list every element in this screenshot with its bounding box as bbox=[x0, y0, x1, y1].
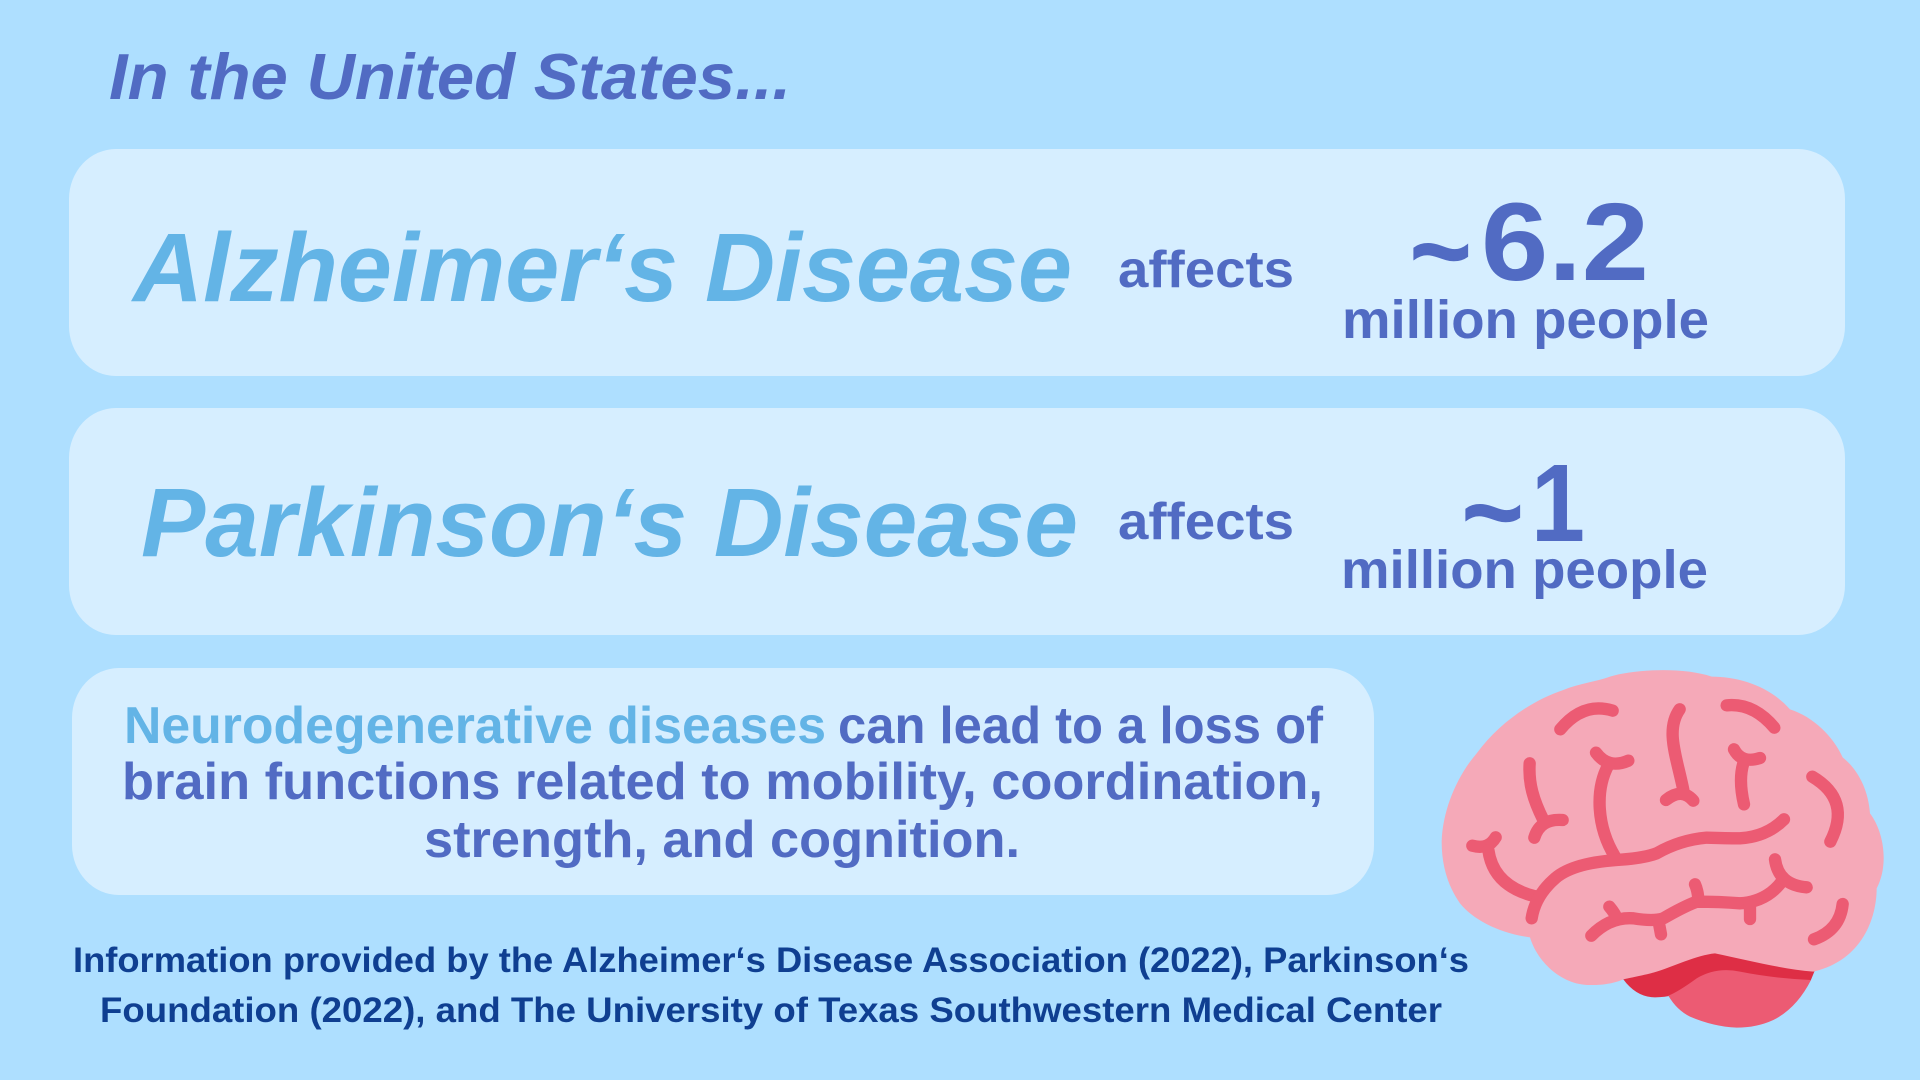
description line 1 highlight: Neurodegenerative diseases bbox=[124, 697, 826, 755]
source citation bbox=[73, 941, 1469, 1030]
number: 1: 1 bbox=[1531, 442, 1585, 565]
disease name: Parkinson's: Parkinson‘s Disease bbox=[141, 468, 1078, 577]
number: 1: ~ bbox=[1462, 454, 1523, 571]
description line 2: brain functions related to mobility, coordination, bbox=[122, 753, 1323, 811]
description line 1: can lead to a loss of bbox=[838, 697, 1324, 755]
label: affects: affects bbox=[1118, 493, 1294, 551]
label: affects: affects bbox=[1118, 241, 1294, 299]
disease name: Alzheimer's: Alzheimer‘s Disease bbox=[131, 213, 1072, 322]
panel: Alzheimer's disease bbox=[69, 149, 1845, 376]
panel: Parkinson's disease bbox=[69, 408, 1845, 635]
panel: neurodegenerative description bbox=[72, 668, 1374, 895]
number: 6.2: 6.2 bbox=[1481, 181, 1649, 304]
unit: million people: million people bbox=[1341, 540, 1708, 600]
source citation: Foundation (2022), and The University of Texas Southwestern Medical Center bbox=[100, 991, 1442, 1030]
number: 6.2: ~ bbox=[1410, 193, 1471, 310]
number: 1 bbox=[1462, 442, 1585, 571]
unit: million people: million people bbox=[1342, 290, 1709, 350]
description line 3: strength, and cognition. bbox=[424, 811, 1020, 869]
source citation: Information provided by the Alzheimer‘s Disease Association (2022), Parkinson‘s bbox=[73, 941, 1469, 980]
title: In the United States... bbox=[109, 40, 791, 113]
number: 6.2 bbox=[1410, 181, 1649, 310]
icon: brain bbox=[1442, 670, 1884, 1028]
